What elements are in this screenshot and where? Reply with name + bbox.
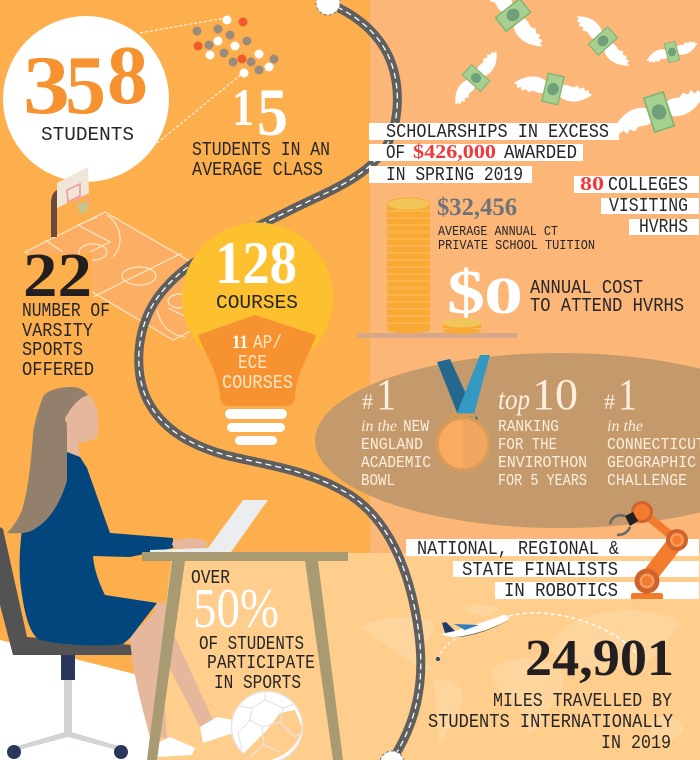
light bulb: courses: 128	[215, 230, 297, 296]
callout: 358 students: 3	[23, 39, 70, 132]
icon: basketball hoop	[54, 167, 90, 237]
stat: academic bowl	[361, 370, 431, 491]
stat: 22 varsity sports: SPORTS	[22, 339, 83, 361]
stat: 22 varsity sports	[22, 242, 110, 381]
callout: scholarships: OF	[386, 142, 405, 164]
callout: scholarships: IN SPRING 2019	[386, 164, 523, 186]
stat: academic bowl: ACADEMIC	[361, 454, 431, 473]
stat: miles travelled	[428, 630, 674, 754]
callout: scholarships: $426,000	[413, 141, 496, 163]
stat: envirothon: ENVIROTHON	[498, 454, 587, 473]
stat: geographic challenge: CHALLENGE	[607, 472, 687, 491]
stat: private tuition: $32,456	[437, 194, 517, 221]
stat: 50% in sports: OF STUDENTS	[199, 633, 304, 655]
stat: zero cost	[447, 259, 684, 327]
woman: ear	[65, 414, 75, 424]
stat: zero cost: $	[447, 259, 485, 327]
road start marker	[316, 0, 340, 15]
stat: envirothon: top	[498, 383, 530, 416]
stat: miles travelled: IN 2019	[601, 732, 671, 754]
stat: 50% in sports: IN SPORTS	[214, 672, 301, 694]
stat: 22 varsity sports: 22	[23, 242, 92, 310]
stat: 50% in sports: 50%	[193, 578, 279, 640]
stat: 15 students per class	[192, 74, 330, 181]
stat: zero cost: ANNUAL COST	[530, 277, 643, 299]
stat: 22 varsity sports: VARSITY	[22, 320, 93, 342]
light bulb: courses	[182, 222, 333, 445]
stat: miles travelled: 24,901	[525, 630, 674, 687]
dot cluster: class of students	[192, 16, 278, 78]
shelf	[357, 333, 517, 338]
icon: medal	[435, 355, 491, 472]
stat: zero cost: 0	[484, 268, 523, 325]
icon: soccer ball	[232, 691, 302, 760]
stat: 15 students per class: AVERAGE CLASS	[192, 159, 323, 181]
road	[139, 3, 421, 760]
stat: academic bowl: 1	[376, 370, 396, 419]
stat: 50% in sports: PARTICIPATE	[207, 652, 315, 674]
desk	[142, 552, 348, 760]
woman: head and neck	[67, 395, 98, 457]
light bulb: courses: COURSES	[216, 292, 298, 314]
stat: academic bowl: NEW	[403, 418, 430, 437]
callout: 358 students: 8	[107, 29, 148, 122]
callout: 358 students	[3, 16, 243, 182]
icon: small coin stack	[443, 318, 481, 334]
stat: geographic challenge: in the	[607, 418, 643, 435]
callout: 358 students: 5	[65, 39, 106, 132]
stat: private tuition: AVERAGE ANNUAL CT	[438, 224, 558, 240]
stat: envirothon: RANKING	[498, 418, 559, 437]
callout: 80 colleges visiting	[574, 173, 699, 238]
icon: tall coin stack	[387, 198, 430, 334]
callout: scholarships: AWARDED	[504, 142, 577, 164]
stat: 15 students per class: STUDENTS IN AN	[192, 139, 330, 161]
callout: 80 colleges visiting: COLLEGES	[608, 174, 688, 196]
stat: 15 students per class: 5	[257, 74, 288, 150]
woman: dress	[20, 452, 173, 645]
callout: scholarships	[369, 121, 619, 186]
callout: robotics: IN ROBOTICS	[504, 580, 618, 602]
callout: scholarships: SCHOLARSHIPS IN EXCESS	[386, 121, 609, 143]
stat: geographic challenge: 1	[618, 370, 637, 419]
stat: private tuition	[437, 194, 595, 254]
stat: 15 students per class: 1	[232, 79, 254, 137]
stat: 22 varsity sports: NUMBER OF	[22, 300, 110, 322]
background: lower light panel	[148, 553, 700, 760]
stat: 50% in sports: OVER	[191, 567, 230, 589]
icon: airplane and flight path	[436, 613, 644, 663]
stat: envirothon: 10	[532, 370, 578, 419]
woman: hand	[172, 538, 208, 550]
callout: 80 colleges visiting: HVRHS	[639, 216, 688, 238]
road end marker	[380, 751, 404, 760]
stat: geographic challenge	[604, 370, 700, 491]
basketball court	[25, 212, 255, 340]
woman: hair	[7, 387, 88, 533]
stat: envirothon: FOR 5 YEARS	[498, 472, 587, 491]
world map	[360, 605, 684, 745]
stat: private tuition: PRIVATE SCHOOL TUITION	[438, 238, 595, 254]
callout: 80 colleges visiting: VISITING	[609, 195, 688, 217]
stat: academic bowl: in the	[361, 418, 397, 435]
panel: rankings ellipse	[315, 353, 700, 528]
background: right peach panel	[370, 0, 700, 553]
icons: flying money	[444, 0, 700, 145]
stat: academic bowl: BOWL	[361, 472, 395, 491]
icon: robot arm	[610, 501, 688, 599]
stat: 22 varsity sports: OFFERED	[22, 359, 94, 381]
light bulb: courses: COURSES	[222, 372, 293, 394]
background: white floor	[0, 640, 150, 760]
stat: miles travelled: MILES TRAVELLED BY	[493, 690, 672, 712]
callout: 80 colleges visiting: 80	[580, 173, 604, 195]
stat: academic bowl: ENGLAND	[361, 436, 423, 455]
callout: 358 students: STUDENTS	[41, 124, 134, 146]
callout: robotics: STATE FINALISTS	[462, 559, 618, 581]
stat: envirothon: FOR THE	[498, 436, 557, 455]
laptop	[150, 500, 268, 552]
stat: academic bowl: #	[362, 389, 373, 414]
woman: legs and shoes	[130, 603, 233, 757]
icon: office chair	[0, 527, 133, 759]
stat: 50% in sports	[191, 567, 315, 694]
callout: robotics: NATIONAL, REGIONAL &	[417, 538, 619, 560]
stat: geographic challenge: #	[604, 389, 615, 414]
stat: envirothon	[498, 370, 587, 491]
light bulb: courses: AP/	[253, 332, 282, 354]
light bulb: courses: 11	[232, 332, 248, 353]
callout: robotics	[406, 538, 699, 602]
light bulb: courses: ECE	[238, 352, 267, 374]
